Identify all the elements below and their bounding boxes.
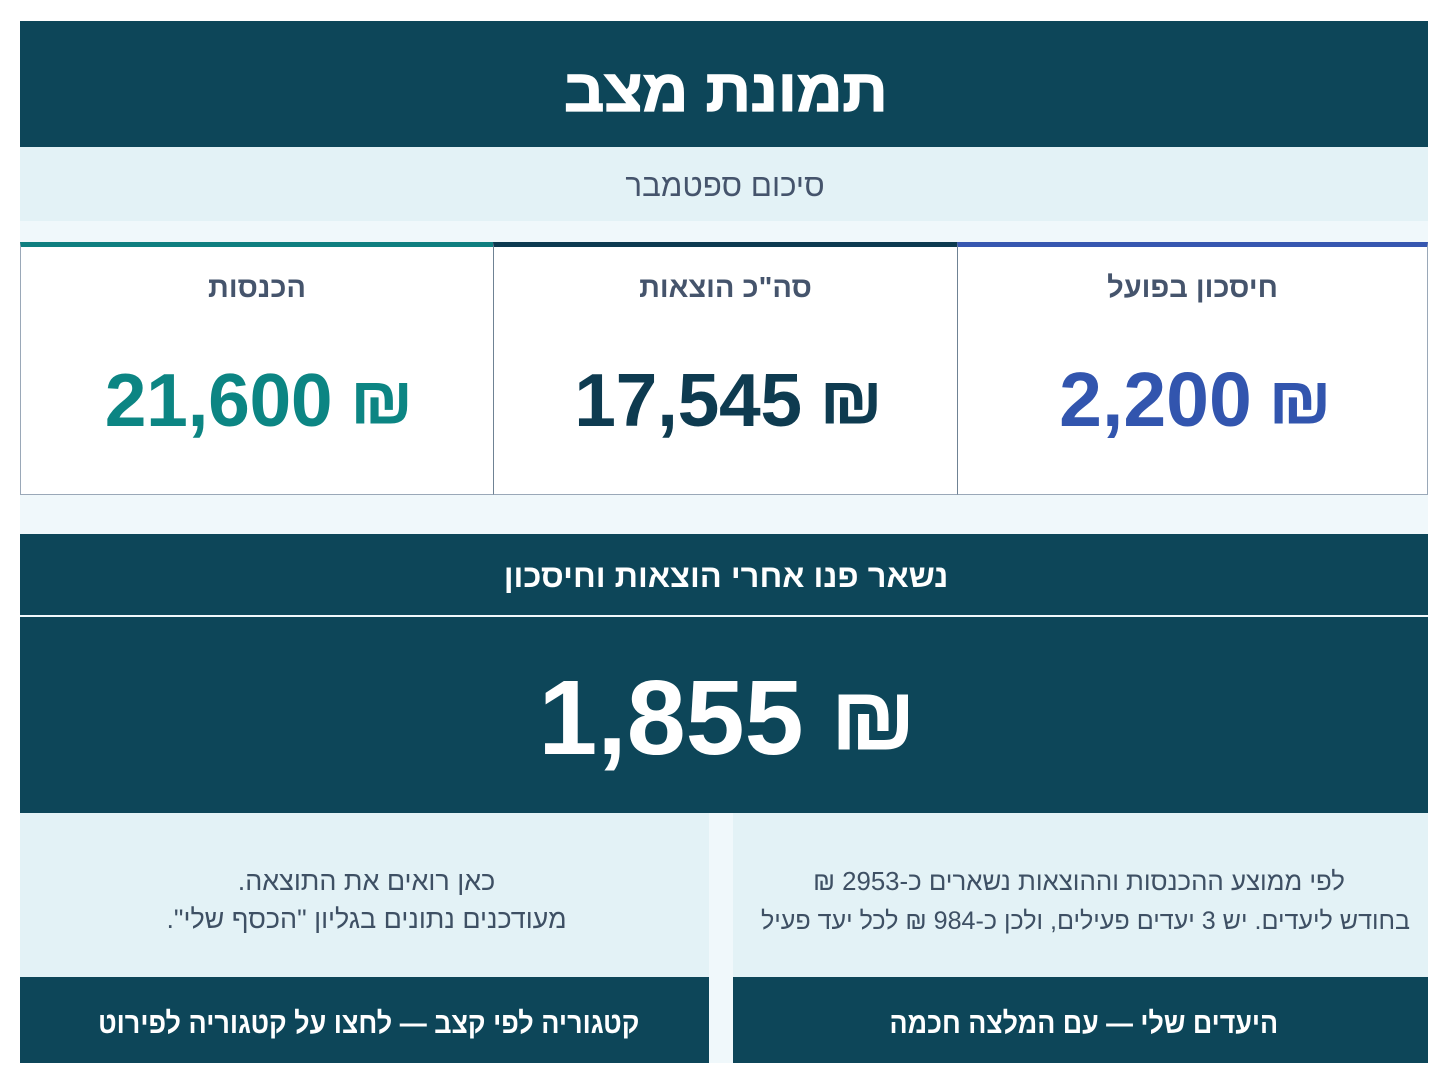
goals heading bar bbox=[733, 977, 1428, 1063]
panel: result note text: כאן רואים את התוצאה. bbox=[238, 866, 495, 896]
income value: 21,600 bbox=[105, 358, 332, 442]
savings value: 2,200 bbox=[1059, 357, 1252, 443]
panel: result note text bbox=[20, 813, 709, 977]
remaining value bbox=[20, 617, 1428, 813]
remaining heading bbox=[20, 534, 1428, 615]
savings value: ₪ bbox=[1268, 364, 1332, 438]
title banner bbox=[20, 21, 1428, 147]
expenses label: סה"כ הוצאות bbox=[639, 272, 812, 304]
income label: הכנסות bbox=[208, 272, 306, 304]
categories heading bar: קטגוריה לפי קצב — לחצו על קטגוריה לפירוט bbox=[98, 1007, 639, 1040]
expenses value: 17,545 bbox=[574, 358, 802, 442]
categories heading bar bbox=[20, 977, 709, 1063]
subtitle bar bbox=[20, 147, 1428, 221]
goals heading bar: היעדים שלי — עם המלצה חכמה bbox=[890, 1007, 1278, 1040]
panel: goals recommendation text bbox=[733, 813, 1428, 977]
income value: ₪ bbox=[350, 364, 413, 438]
panel: savings card bbox=[957, 242, 1428, 495]
savings label: חיסכון בפועל bbox=[1107, 272, 1278, 304]
remaining value: 1,855 bbox=[538, 659, 804, 777]
panel: income card bbox=[20, 242, 494, 495]
remaining value: ₪ bbox=[830, 667, 917, 769]
remaining heading: נשאר פנו אחרי הוצאות וחיסכון bbox=[504, 557, 948, 594]
subtitle bar: סיכום ספטמבר bbox=[625, 168, 825, 203]
panel: result note text: מעודכנים נתונים בגליון "הכסף שלי". bbox=[166, 904, 567, 934]
panel: goals recommendation text: בחודש ליעדים. יש 3 יעדים פעילים, ולכן כ-984 ₪ לכל יעד פעיל bbox=[761, 907, 1410, 935]
expenses value: ₪ bbox=[819, 364, 883, 438]
panel: goals recommendation text: לפי ממוצע ההכנסות וההוצאות נשארים כ-2953 ₪ bbox=[813, 868, 1345, 896]
title banner: תמונת מצב bbox=[564, 58, 888, 124]
panel: expenses card bbox=[493, 242, 958, 495]
